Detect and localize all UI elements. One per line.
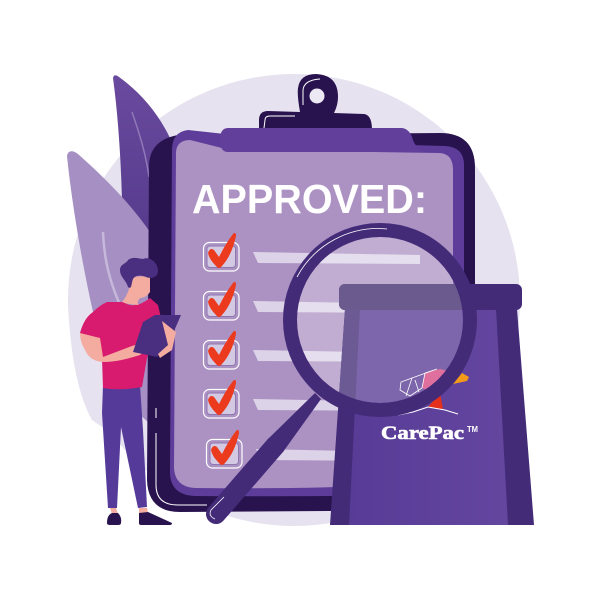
ankles [110,508,148,514]
check row 2 [204,282,420,320]
small clipboard [133,315,181,357]
bag inside lens [339,284,463,403]
lens ring [290,230,470,410]
right hand [158,321,176,358]
check row 3 [204,331,420,369]
front leaf [67,151,152,425]
logo mark [398,369,469,415]
magnifying glass [210,229,470,519]
bag body [330,309,534,525]
logo text: CarePac [381,423,464,444]
trousers [102,385,147,508]
neck and face [122,276,150,305]
shoes [107,512,172,525]
left arm [80,333,149,362]
bag top band [339,284,522,310]
person [80,258,181,525]
bag [330,284,534,525]
hair [120,258,158,288]
lens tint [297,237,454,392]
bag panel [349,309,508,525]
clipboard edge highlight [156,408,207,505]
heading: APPROVED: APPROVED: [192,176,427,222]
shirt [80,298,161,389]
paper sheet [174,140,453,488]
logo text: TM [467,425,478,434]
illustration: approved checklist under magnifier [67,74,534,526]
clipboard [147,74,475,512]
check row 1 [204,233,420,271]
check row 4 [204,380,420,418]
handle [216,446,275,514]
back leaf [113,75,170,245]
clipboard front board [170,130,464,496]
clip [220,74,425,152]
background circle [68,74,520,526]
handle neck [267,393,321,452]
clipboard back board [147,133,475,512]
check row 5 [206,430,403,468]
